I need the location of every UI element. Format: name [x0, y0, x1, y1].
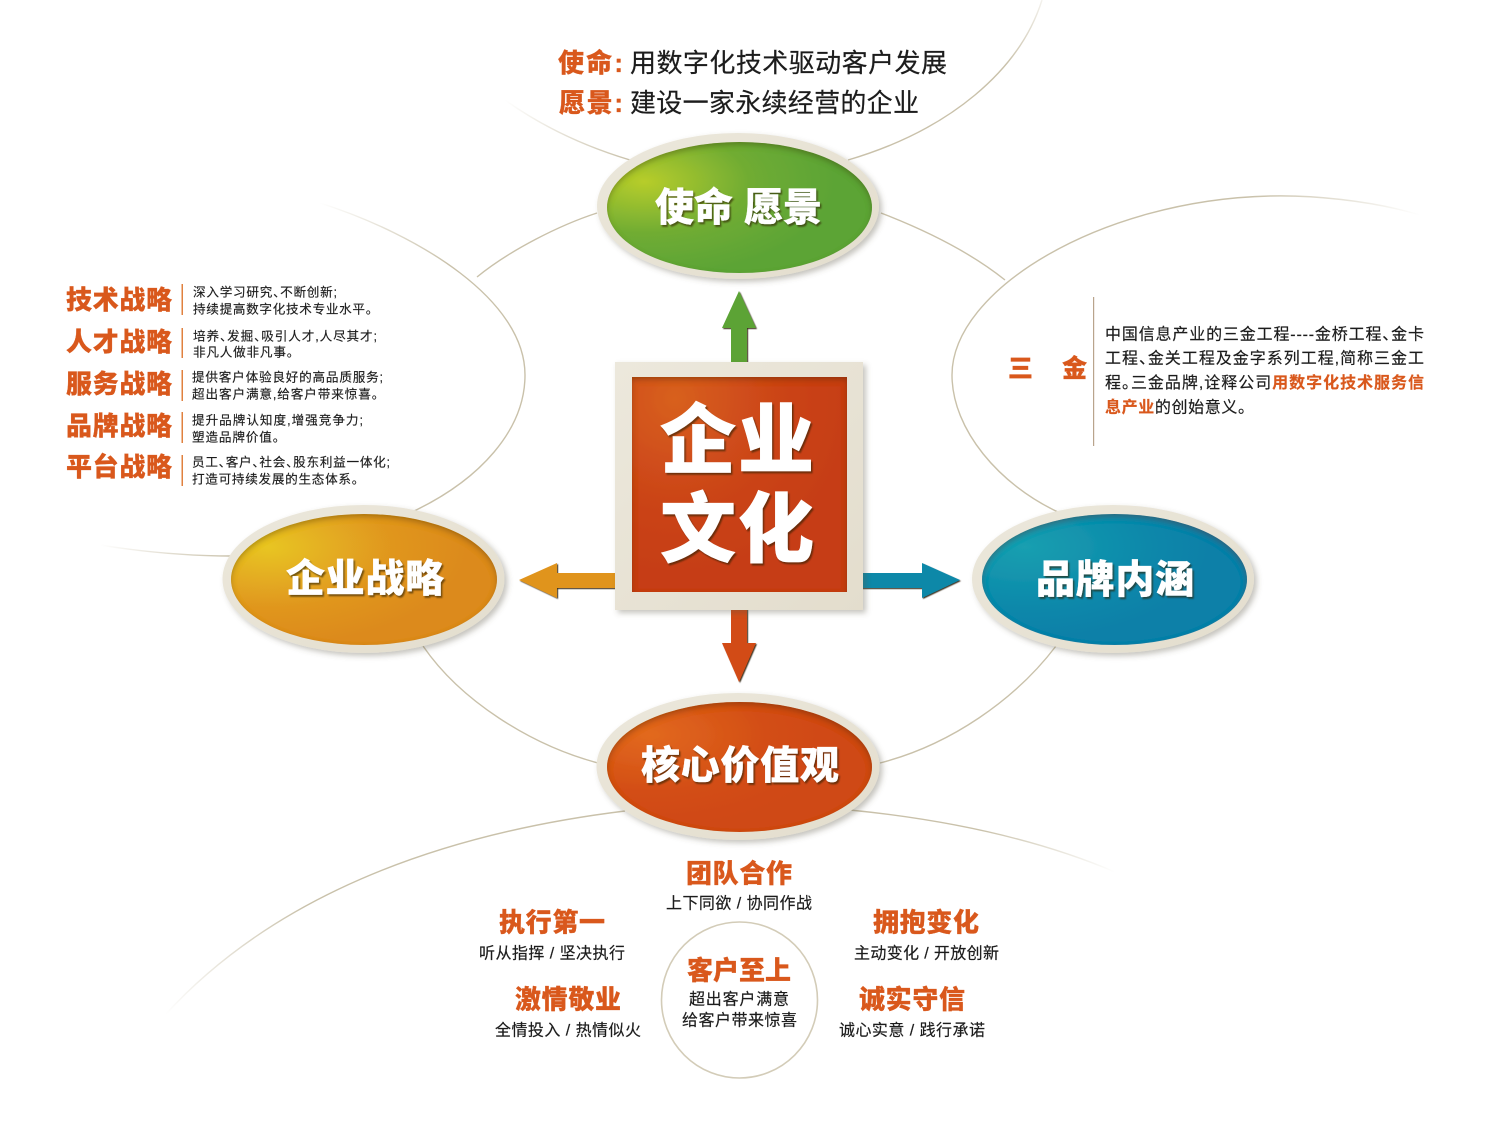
strategy: platform: 打造可持续发展的生态体系。	[192, 472, 358, 486]
oval: brand connotation	[972, 505, 1254, 653]
arrow: red down	[722, 608, 756, 682]
value: customer first: 超出客户满意	[689, 990, 789, 1008]
central square: corporate culture	[615, 362, 863, 610]
mission and vision statement	[558, 48, 947, 118]
strategy: brand	[66, 411, 363, 444]
value: integrity	[839, 984, 985, 1040]
oval: core values: 核心价值观	[641, 745, 839, 788]
strategy: platform: 员工、客户、社会、股东利益一体化;	[192, 454, 390, 470]
oval: brand connotation: 品牌内涵	[1036, 559, 1194, 602]
oval: core values	[596, 693, 880, 840]
oval: mission vision: 使命 愿景	[655, 186, 822, 230]
three gold description: 程。三金品牌,诠释公司用数字化技术服务信	[1105, 373, 1424, 392]
arrow: orange left	[519, 563, 617, 598]
mission and vision statement: 建设一家永续经营的企业	[630, 88, 919, 118]
panel: core values list	[479, 858, 999, 1078]
strategy: technology	[66, 284, 372, 316]
value circle outline	[662, 922, 818, 1078]
strategy: platform: 平台战略	[66, 452, 172, 482]
central square: corporate culture: 企业	[660, 399, 814, 484]
value: customer first: 客户至上	[687, 956, 791, 986]
mission and vision statement: 愿景:	[559, 88, 623, 118]
strategy: talent: 非凡人做非凡事。	[193, 346, 293, 360]
central square: corporate culture: 文化	[660, 488, 814, 573]
value: integrity: 诚实守信	[859, 984, 965, 1014]
strategy: service: 超出客户满意,给客户带来惊喜。	[192, 386, 378, 402]
heading: three gold	[1008, 354, 1087, 383]
heading: three gold: 三	[1008, 355, 1033, 383]
strategy: service	[66, 369, 383, 402]
value: passion	[495, 984, 641, 1040]
value: team work: 团队合作	[686, 858, 792, 888]
strategy: platform	[66, 452, 390, 486]
strategy: talent: 培养、发掘、吸引人才,人尽其才;	[193, 328, 377, 344]
arrow: blue right	[861, 563, 960, 598]
value: embrace change	[854, 908, 999, 962]
strategy: brand: 提升品牌认知度,增强竞争力;	[192, 412, 363, 428]
strategy: brand: 品牌战略	[66, 411, 172, 441]
panel: strategy list	[66, 284, 390, 486]
oval: mission vision	[597, 133, 879, 279]
three gold description: 中国信息产业的三金工程----金桥工程、金卡	[1105, 326, 1424, 344]
heading: three gold: 金	[1062, 354, 1087, 383]
mission and vision statement: 用数字化技术驱动客户发展	[630, 48, 947, 78]
arrow: green up	[722, 291, 756, 364]
value: integrity: 诚心实意 / 践行承诺	[839, 1020, 985, 1040]
mission and vision statement: 使命:	[558, 48, 623, 78]
three gold description: 息产业的创始意义。	[1105, 398, 1246, 416]
panel: three gold	[1008, 297, 1424, 446]
value: team work	[666, 858, 812, 912]
strategy: talent: 人才战略	[66, 327, 172, 357]
strategy: service: 提供客户体验良好的高品质服务;	[192, 370, 383, 384]
connector curves	[100, 0, 1420, 1015]
value: passion: 全情投入 / 热情似火	[495, 1022, 641, 1040]
value: embrace change: 主动变化 / 开放创新	[854, 944, 999, 962]
three gold description: 工程、金关工程及金字系列工程,简称三金工	[1105, 350, 1424, 368]
value: execution first: 执行第一	[499, 908, 605, 938]
strategy: technology: 持续提高数字化技术专业水平。	[193, 302, 372, 316]
strategy: technology: 技术战略	[66, 285, 172, 315]
strategy: brand: 塑造品牌价值。	[192, 430, 279, 444]
value: execution first	[479, 908, 625, 962]
strategy: technology: 深入学习研究、不断创新;	[193, 284, 337, 300]
value: execution first: 听从指挥 / 坚决执行	[479, 944, 625, 962]
value: embrace change: 拥抱变化	[873, 908, 979, 938]
three gold description	[1105, 326, 1424, 416]
value: team work: 上下同欲 / 协同作战	[666, 894, 812, 912]
value: customer first	[682, 956, 797, 1030]
value: customer first: 给客户带来惊喜	[682, 1012, 797, 1030]
strategy: service: 服务战略	[66, 369, 172, 399]
oval: corporate strategy: 企业战略	[286, 558, 444, 601]
strategy: talent	[66, 327, 377, 360]
value: passion: 激情敬业	[515, 984, 621, 1014]
oval: corporate strategy	[222, 505, 504, 653]
